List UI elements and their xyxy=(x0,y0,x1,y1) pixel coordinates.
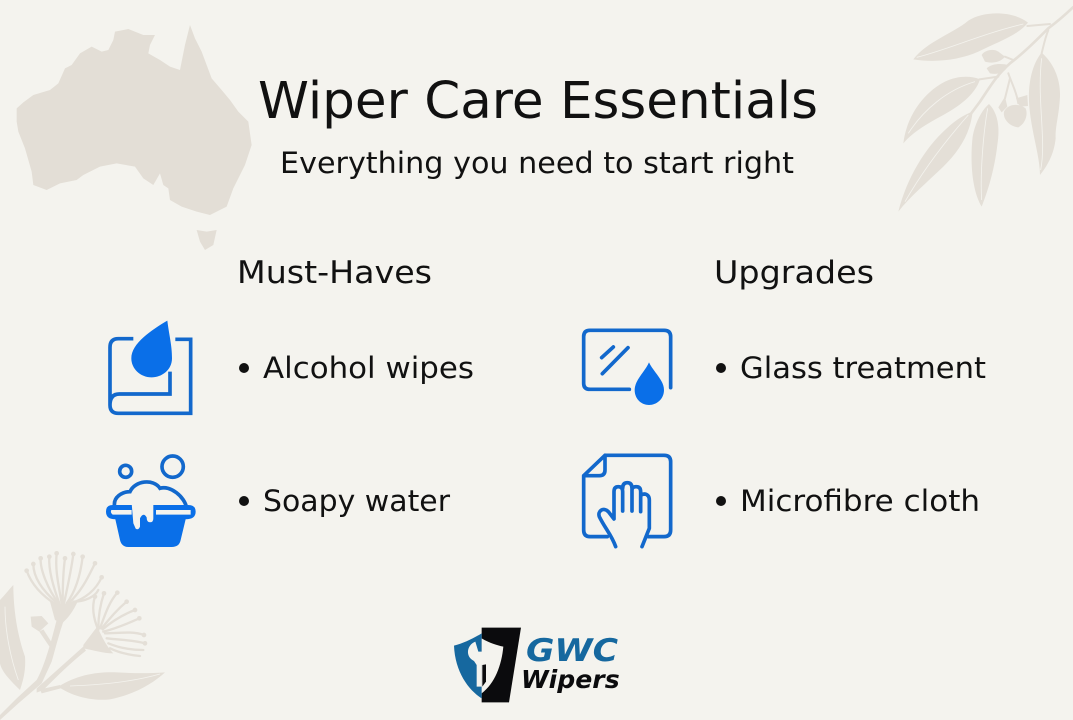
list item: glass treatment: Glass treatment xyxy=(740,351,986,385)
logo: GWC Wipers: Wipers xyxy=(521,665,620,694)
title: Wiper Care Essentials xyxy=(258,72,818,131)
map of Australia xyxy=(17,25,252,250)
icon: hand on microfibre cloth xyxy=(584,455,671,547)
list item: soapy water: Soapy water xyxy=(263,484,450,518)
logo: GWC Wipers xyxy=(454,628,620,702)
icon: towel with drop xyxy=(110,321,191,413)
eucalyptus flowers bottom left xyxy=(0,551,165,720)
list item: microfibre cloth: Microfibre cloth xyxy=(740,484,980,518)
icon: glass with drop xyxy=(584,330,671,405)
heading: must-haves: Must-Haves xyxy=(237,255,432,291)
subtitle: Everything you need to start right xyxy=(280,146,794,180)
logo: GWC Wipers: GWC xyxy=(526,633,618,669)
list item: alcohol wipes: Alcohol wipes xyxy=(263,351,474,385)
icon: soap basin xyxy=(106,456,196,547)
heading: upgrades: Upgrades xyxy=(714,255,874,291)
eucalyptus branch top right xyxy=(898,7,1073,212)
